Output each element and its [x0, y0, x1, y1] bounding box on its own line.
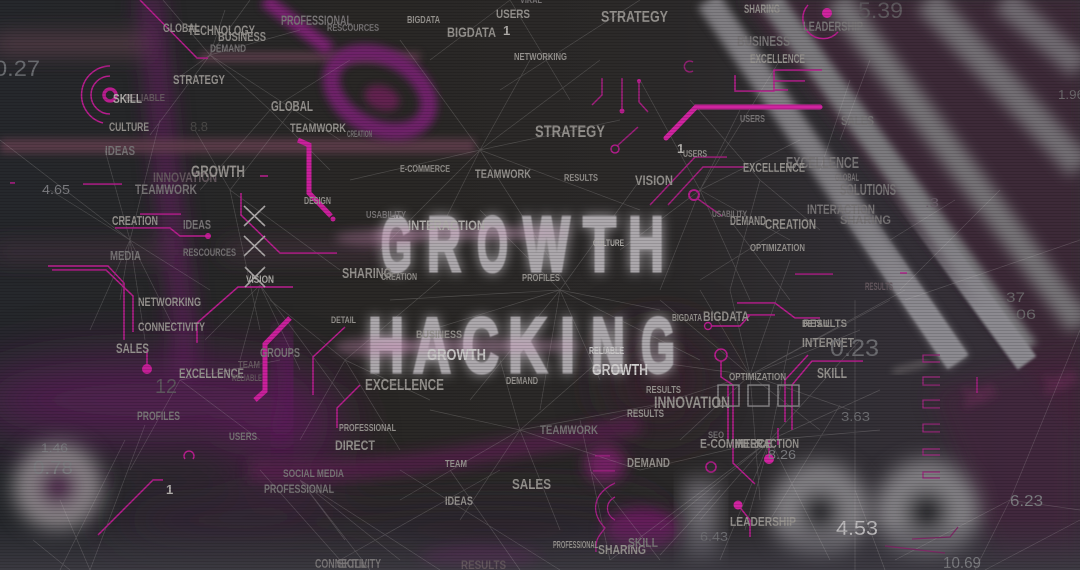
keyword cloud: centre: CULTURE: [593, 238, 624, 248]
title line: growth: G: [381, 200, 412, 288]
keyword cloud: lower right: LEADERSHIP: [730, 514, 796, 529]
keyword cloud: top centre: [400, 0, 673, 188]
keyword cloud: top centre: BIGDATA: [407, 15, 440, 26]
keyword cloud: lower right: SKILL: [817, 365, 847, 382]
numeric readouts: 6.23: [1010, 493, 1043, 510]
trace: lower left: [98, 480, 163, 535]
keyword cloud: left: IDEAS: [183, 217, 211, 232]
keyword cloud: lower right: RESULTS: [803, 318, 847, 330]
dot: e-commerce: [769, 428, 778, 458]
numeric readouts: .3: [925, 195, 939, 210]
keyword cloud: upper right: EXCELLENCE: [786, 155, 859, 172]
numeric readouts: 0.23: [830, 335, 879, 362]
thick trace: top right: [666, 107, 820, 138]
keyword cloud: left: GROUPS: [260, 345, 300, 360]
keyword cloud: upper left: GLOBAL: [271, 98, 313, 115]
keyword cloud: upper right: SOLUTIONS: [840, 182, 896, 199]
keyword cloud: lower right: OPTIMIZATION: [729, 372, 786, 383]
title line: growth: R: [427, 200, 461, 288]
keyword cloud: left: RELIABLE: [232, 373, 262, 383]
keyword cloud: upper left: IDEAS: [105, 143, 135, 158]
pink streak, lower centre: [250, 424, 640, 472]
keyword cloud: top centre: 1: [503, 23, 510, 38]
x marks: [244, 206, 265, 287]
keyword cloud: left: CONNECTIVITY: [138, 320, 205, 334]
keyword cloud: left: MEDIA: [110, 248, 141, 263]
thick trace: design: [298, 140, 331, 216]
keyword cloud: top centre: BIGDATA: [447, 24, 496, 40]
keyword cloud: lower centre: SHARING: [598, 542, 646, 557]
keyword cloud: lower centre: PROFESSIONAL: [553, 540, 598, 551]
numeric readouts: 4.65: [42, 182, 70, 197]
keyword cloud: upper left: BUSINESS: [218, 29, 266, 44]
keyword cloud: centre: DEMAND: [506, 376, 538, 387]
keyword cloud: top centre: USERS: [496, 7, 530, 21]
keyword cloud: lower centre: SKILL: [628, 535, 658, 550]
keyword cloud: left: PROFILES: [137, 409, 180, 423]
keyword cloud: lower right: [627, 308, 854, 529]
keyword cloud: upper left: CREATION: [347, 129, 372, 139]
trace: detail: [313, 327, 360, 428]
keyword cloud: left: VISION: [246, 274, 274, 286]
magenta blobs, lower centre: [420, 446, 680, 570]
keyword cloud: upper left: RELIABLE: [125, 93, 165, 104]
digit zero: [875, 460, 979, 564]
keyword cloud: lower centre: DIRECT: [335, 437, 375, 453]
keyword cloud: lower centre: DEMAND: [627, 455, 670, 470]
keyword cloud: top centre: E-COMMERCE: [400, 164, 450, 175]
keyword cloud: centre: [342, 210, 648, 394]
keyword cloud: left: CREATION: [112, 213, 158, 228]
keyword cloud: lower right: INTERNET: [802, 335, 854, 350]
title line: growth: [381, 200, 664, 288]
numeric readouts: 3.63: [841, 409, 870, 424]
traces: vision right: [650, 157, 747, 205]
digit ring, bottom left: [14, 443, 102, 531]
trace: skill: [785, 355, 863, 430]
trace: x marks connector: [241, 193, 337, 253]
keyword cloud: upper left: RESCOURCES: [327, 23, 379, 34]
keyword cloud: lower right: DETAIL: [802, 319, 830, 330]
title line: hacking: C: [462, 301, 499, 389]
keyword cloud: centre: RELIABLE: [589, 346, 624, 357]
thick trace: groups: [255, 318, 290, 400]
target rings, upper left: [82, 66, 116, 123]
title line: hacking: G: [641, 301, 675, 389]
keyword cloud: lower right: INTERACTION: [735, 436, 799, 451]
keyword cloud: upper left: TEAMWORK: [290, 121, 346, 135]
keyword cloud: left: DETAIL: [331, 315, 356, 325]
sharp pink bands: [0, 57, 475, 146]
keyword cloud: lower right: BIGDATA: [703, 308, 749, 324]
keyword cloud: lower centre: SALES: [512, 476, 551, 493]
dashes, right: [795, 273, 907, 274]
keyword cloud: upper right: [677, 2, 896, 293]
keyword cloud: lower right: BIGDATA: [672, 313, 702, 324]
blurred counter digits "100": [14, 443, 979, 566]
dot and rings, top: [803, 5, 838, 39]
keyword cloud: lower right: RESULTS: [627, 408, 664, 420]
trace: optimization: [715, 349, 755, 484]
title line: hacking: K: [508, 301, 547, 389]
keyword cloud: lower right: E-COMMERCE: [700, 436, 772, 451]
keyword cloud: centre: INTERACTION: [408, 217, 485, 233]
numeric readouts: 8.8: [190, 119, 208, 134]
keyword cloud: left: NETWORKING: [138, 295, 201, 309]
keyword cloud: lower centre: 1: [166, 482, 173, 497]
keyword cloud: centre: SHARING: [342, 265, 392, 282]
keyword cloud: upper right: USERS: [740, 114, 765, 125]
dot trace: sales: [146, 350, 148, 368]
keyword cloud: left: TEAMWORK: [135, 181, 197, 197]
title line: hacking: I: [560, 301, 575, 389]
title line: growth: H: [628, 200, 664, 288]
square outlines: [718, 385, 799, 406]
keyword cloud: upper right: EXCELLENCE: [743, 160, 805, 175]
ring trace: strategy: [611, 127, 638, 153]
title line: growth: T: [583, 200, 616, 288]
keyword cloud: upper right: SHARING: [744, 2, 780, 16]
keyword cloud: upper left: TECHNOLOGY: [188, 22, 255, 38]
keyword cloud: lower centre: SOCIAL MEDIA: [283, 468, 344, 480]
keyword cloud: upper right: USERS: [683, 149, 707, 160]
keyword cloud: left: SALES: [116, 340, 149, 356]
trace: bottom right: [885, 527, 958, 553]
keyword cloud: left: [110, 162, 356, 443]
keyword cloud: top centre: NETWORKING: [514, 52, 567, 63]
keyword cloud: top centre: STRATEGY: [535, 122, 605, 141]
numeric readouts: 37: [1006, 289, 1025, 305]
keyword cloud: upper right: INTERACTION: [807, 201, 875, 217]
keyword cloud: centre: BUSINESS: [416, 329, 462, 341]
keyword cloud: upper left: GLOBAL: [163, 21, 200, 35]
ring, lower centre: [706, 462, 716, 472]
title line: hacking: N: [591, 301, 625, 389]
keyword cloud: centre: PROFILES: [522, 273, 560, 284]
dashes, left: [10, 176, 268, 184]
numeric readouts: 06: [1016, 306, 1036, 322]
diagonal grey stripes, top right: Jan: [957, 374, 999, 414]
keyword cloud: upper right: 1: [677, 141, 684, 156]
trace: creation: [115, 214, 207, 236]
keyword cloud: upper left: PROFESSIONAL: [281, 12, 352, 28]
keyword cloud: centre: GROWTH: [592, 362, 648, 379]
keyword cloud: upper right: RESULTS: [865, 281, 893, 293]
keyword cloud: upper right: SALES: [841, 113, 874, 128]
keyword cloud: centre: USABILITY: [366, 210, 406, 221]
keyword cloud: upper left: [105, 12, 379, 158]
small ring, centre top: [684, 61, 693, 72]
numeric readouts: 6.43: [700, 529, 728, 544]
keyword cloud: lower centre: PROFESSIONAL: [264, 482, 334, 496]
keyword cloud: centre: EXCELLENCE: [365, 377, 444, 394]
title line: hacking: [368, 301, 675, 389]
keyword cloud: left: GROWTH: [191, 162, 245, 181]
numeric readouts: 8.26: [768, 447, 796, 462]
keyword cloud: upper right: USABILITY: [712, 209, 747, 219]
keyword cloud: left: RESCOURCES: [183, 247, 236, 259]
keyword cloud: upper right: OPTIMIZATION: [750, 243, 805, 254]
keyword cloud: centre: CREATION: [381, 272, 417, 283]
comb brackets, right: [923, 355, 940, 478]
numeric readouts: 1.46: [41, 441, 68, 455]
keyword cloud: lower centre: [166, 423, 670, 570]
trace cluster, centre top: [592, 78, 648, 112]
title line: hacking: H: [368, 301, 404, 389]
trace: big data: [712, 303, 820, 326]
keyword cloud: lower centre: TEAM: [445, 459, 467, 470]
tilted blurred ring: [318, 37, 442, 147]
keyword cloud: left: INNOVATION: [153, 169, 217, 185]
arcs and ticks, lower centre: [593, 456, 615, 552]
title line: hacking: A: [413, 301, 451, 389]
diagonal grey stripes, top right: [708, 0, 1080, 570]
numeric readouts: 0.78: [33, 458, 73, 478]
keyword cloud: upper right: CREATION: [765, 216, 816, 233]
bottom haze band: [0, 520, 1080, 570]
bracket trace, top right: [735, 70, 822, 91]
pink light streaks over title: [335, 228, 585, 356]
keyword cloud: top centre: RESULTS: [564, 173, 598, 184]
blurred magenta light trails: [0, 0, 710, 570]
dot trace: leadership: [738, 505, 750, 537]
title: growth hacking: [368, 200, 675, 389]
keyword cloud: upper right: DEMAND: [730, 213, 766, 228]
keyword cloud: lower right: INNOVATION: [654, 393, 730, 412]
keyword cloud: top centre: STRATEGY: [601, 9, 668, 26]
title line: growth: O: [477, 200, 508, 288]
trace: media: [48, 266, 133, 340]
keyword cloud: lower right: RESULTS: [646, 385, 681, 396]
keyword cloud: top centre: VISION: [635, 172, 673, 188]
digit zero: [770, 462, 870, 562]
keyword cloud: upper left: CULTURE: [109, 120, 149, 134]
keyword cloud: left: DESIGN: [304, 196, 331, 207]
keyword cloud: lower centre: TEAMWORK: [540, 423, 598, 437]
keyword cloud: upper left: SKILL: [113, 91, 142, 106]
small ring, lower left: [184, 451, 194, 459]
keyword cloud: centre: GROWTH: [427, 347, 486, 364]
numeric readouts: 12: [155, 376, 177, 398]
keyword cloud: lower centre: PROFESSIONAL: [339, 423, 396, 434]
trace: vision: [197, 287, 293, 343]
trace: top left: [140, 0, 208, 58]
keyword cloud: lower centre: IDEAS: [445, 494, 473, 508]
keyword cloud: upper right: SHARING: [840, 213, 891, 227]
numeric readouts: 4.53: [836, 518, 878, 540]
keyword cloud: upper right: BUSINESS: [737, 33, 790, 50]
keyword cloud: left: EXCELLENCE: [179, 365, 244, 381]
ring trace: usability: [689, 190, 722, 216]
keyword cloud: upper right: EXCELLENCE: [750, 51, 805, 66]
keyword cloud: lower right: SEO: [708, 430, 724, 440]
title line: growth: W: [523, 200, 570, 288]
keyword cloud: top centre: TEAMWORK: [475, 167, 531, 181]
digit one: [684, 480, 718, 566]
keyword cloud: upper right: GLOBAL: [835, 172, 859, 184]
keyword cloud: upper left: STRATEGY: [173, 72, 225, 87]
keyword cloud: upper right: LEADERSHIP: [803, 18, 863, 34]
keyword cloud: left: TEAM: [238, 360, 260, 371]
keyword cloud: left: USERS: [229, 431, 257, 443]
keyword cloud: upper left: DEMAND: [210, 43, 246, 55]
